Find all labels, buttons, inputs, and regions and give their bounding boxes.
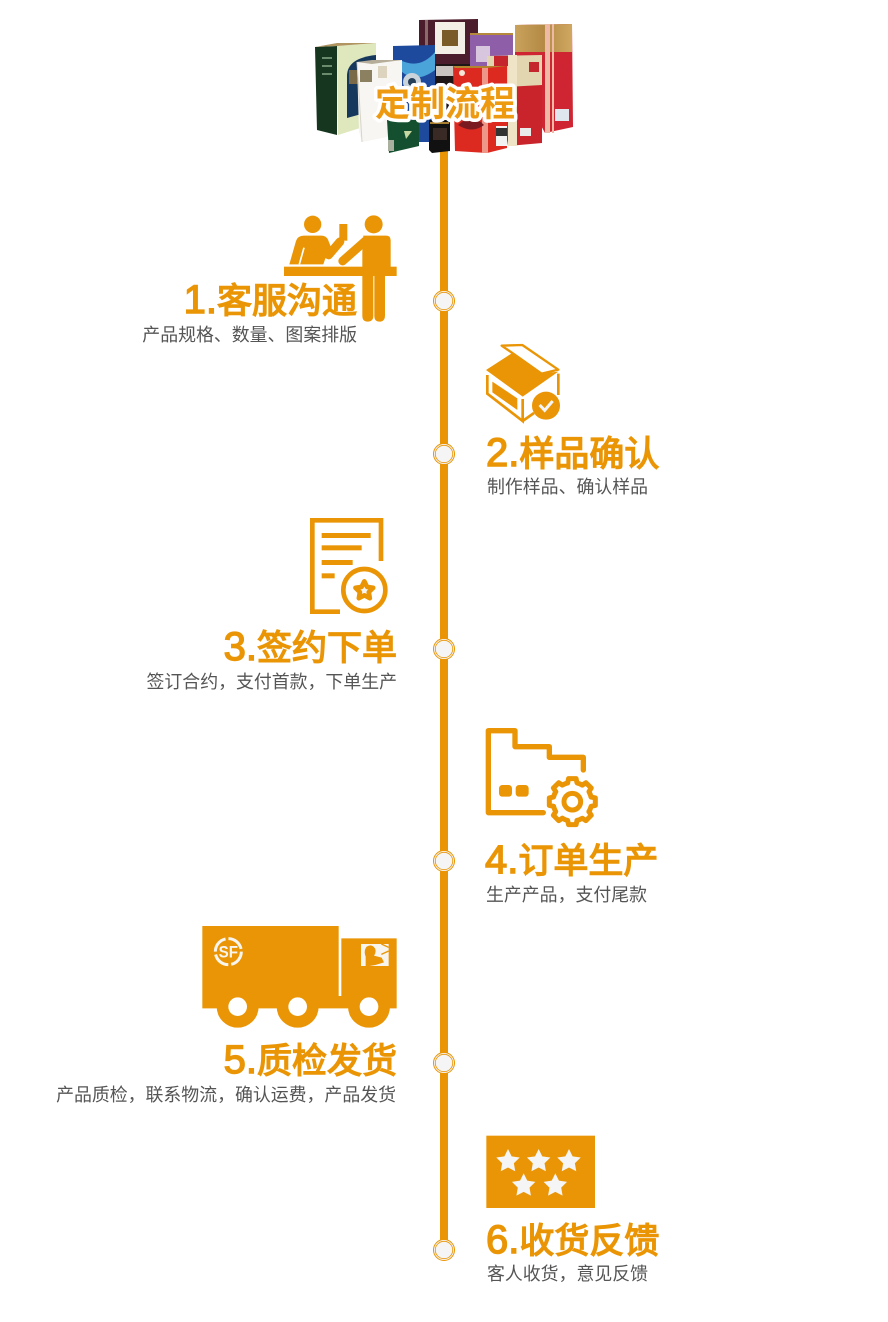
timeline vertical line: [440, 150, 448, 1242]
description: 生产产品，支付尾款: [486, 885, 647, 905]
icon: document with star badge: [312, 520, 385, 612]
icon: delivery truck: SF: [219, 943, 238, 962]
timeline node 3: [434, 638, 454, 660]
step 1: customer service: [142, 215, 397, 345]
tin can: big red: [453, 66, 507, 153]
tin can: dark green small: [387, 120, 419, 153]
icon: open box with check: [486, 345, 560, 421]
icon: delivery truck: [202, 926, 397, 1028]
timeline node 1: [434, 290, 454, 312]
timeline node 5: [434, 1052, 454, 1074]
description: 签订合约，支付首款，下单生产: [147, 672, 397, 692]
timeline node 4: [434, 850, 454, 872]
heading: 3.签约下单: [224, 625, 397, 669]
step 6: receipt and feedback: [486, 1136, 659, 1284]
tin can: tall gold and red: [515, 24, 573, 133]
tin can: white: [357, 60, 402, 142]
timeline node 6: [434, 1240, 454, 1260]
step 4: order production: [485, 731, 658, 905]
heading: 6.收货反馈: [486, 1218, 659, 1262]
icon: five stars panel: [486, 1136, 595, 1208]
tin can: green and cream: [315, 43, 376, 135]
heading: 4.订单生产: [485, 838, 658, 882]
main title: 定制流程: [375, 85, 515, 124]
icon: factory with gear: [488, 731, 596, 825]
description: 客人收货，意见反馈: [487, 1264, 648, 1284]
step 3: contract and order: [147, 520, 397, 692]
tin can: blue: [393, 45, 435, 142]
step 5: inspection and shipping: [56, 926, 397, 1105]
tin can: maroon: [419, 19, 478, 112]
heading: 2.样品确认: [486, 431, 659, 475]
tin can: black small: [429, 120, 450, 153]
description: 产品质检，联系物流，确认运费，产品发货: [56, 1085, 396, 1105]
heading: 5.质检发货: [224, 1038, 397, 1082]
tin can: purple: [470, 33, 513, 70]
timeline node 2: [434, 444, 454, 464]
description: 产品规格、数量、图案排版: [142, 325, 357, 345]
heading: 1.客服沟通: [184, 278, 357, 322]
header: product tin cans: [315, 19, 573, 153]
icon: two people at counter: [284, 215, 397, 322]
tin can: cream and red: [487, 55, 542, 146]
description: 制作样品、确认样品: [487, 477, 648, 497]
step 2: sample confirmation: [486, 345, 659, 497]
